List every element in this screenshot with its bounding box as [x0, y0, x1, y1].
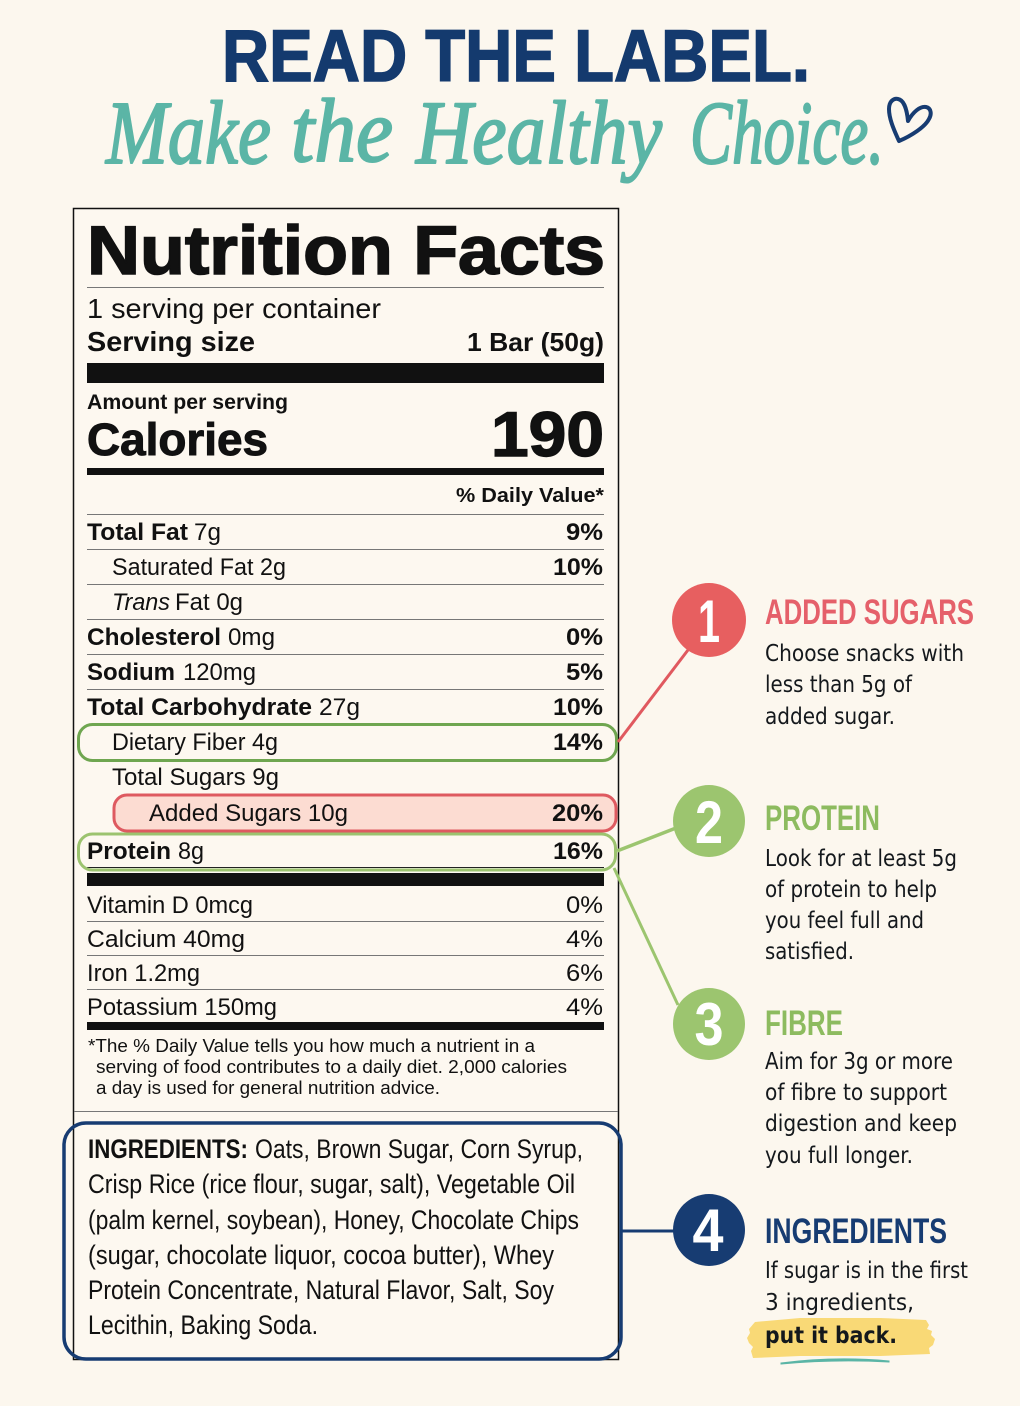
serving information — [87, 293, 604, 357]
subtitle: make the healthy choice: Healthy — [415, 84, 662, 183]
row: sodium: 5% — [566, 659, 603, 686]
row: calcium: 4% — [566, 926, 603, 953]
heading: nutrition facts: Nutrition Facts — [87, 212, 605, 289]
footnote: a day is used for general nutrition advice. — [96, 1078, 440, 1098]
serving information: Serving size — [87, 326, 255, 357]
highlight: protein — [78, 834, 616, 870]
row: dietary fiber: Dietary Fiber 4g — [112, 729, 278, 756]
ingredients list: (sugar, chocolate liquor, cocoa butter), Whey — [88, 1240, 554, 1270]
arrow: connector to fibre callout — [614, 868, 678, 1005]
badge 1: 1 — [698, 588, 720, 655]
badge 4 — [673, 1194, 745, 1266]
badge 3: 3 — [694, 991, 724, 1058]
row: added sugars — [149, 800, 603, 827]
subtitle: make the healthy choice: Make — [104, 84, 271, 183]
text: ingredients advice: If sugar is in the first — [765, 1258, 968, 1284]
row: total fat: 9% — [566, 519, 603, 546]
badge 3 — [673, 988, 745, 1060]
ingredients list: Lecithin, Baking Soda. — [88, 1310, 318, 1340]
callout 4: ingredients — [673, 1194, 968, 1364]
highlight: dietary fiber — [78, 724, 616, 760]
callout 2: protein — [673, 785, 957, 965]
row: saturated fat: Saturated Fat 2g — [112, 554, 286, 581]
badge 4: 4 — [692, 1197, 724, 1264]
text: protein advice: Look for at least 5g — [765, 846, 957, 872]
row: potassium: 4% — [566, 994, 603, 1021]
text: ingredients advice: 3 ingredients, — [765, 1290, 914, 1316]
row: total carbohydrate — [87, 694, 603, 721]
text: fibre advice — [765, 1049, 957, 1169]
highlight: yellow brush stroke — [747, 1318, 935, 1358]
row: saturated fat: 10% — [553, 554, 603, 581]
row: added sugars: 20% — [552, 800, 603, 827]
row: protein: 16% — [553, 838, 603, 865]
text: protein advice — [765, 846, 957, 965]
icon: heart — [889, 99, 931, 141]
panel: nutrition facts label — [74, 208, 618, 1360]
row: added sugars: Added Sugars 10g — [149, 800, 348, 827]
daily value header: % Daily Value* — [456, 484, 604, 507]
ingredients list: INGREDIENTS: — [88, 1134, 248, 1164]
arrow: connector to protein callout — [617, 828, 676, 851]
callout 3: fibre — [673, 988, 957, 1169]
footnote — [88, 1036, 567, 1098]
subtitle: make the healthy choice: Choice. — [690, 84, 884, 183]
row: dietary fiber: 14% — [553, 729, 603, 756]
callout 1: added sugars — [672, 583, 974, 730]
row: protein — [87, 838, 603, 865]
arrow: connector to added sugars callout — [618, 650, 688, 742]
title: read the label: READ THE LABEL. — [222, 16, 810, 97]
text: fibre advice: of fibre to support — [765, 1080, 947, 1106]
text: added sugars advice: less than 5g of — [765, 672, 913, 698]
row: iron: Iron 1.2mg — [87, 960, 200, 987]
text: protein advice: you feel full and — [765, 908, 924, 934]
row: total carbohydrate: 10% — [553, 694, 603, 721]
row: protein: Protein — [87, 838, 171, 865]
text: added sugars advice — [765, 641, 964, 730]
row: sodium: 120mg — [183, 659, 256, 686]
row: sodium — [87, 659, 603, 686]
calories block — [87, 391, 604, 470]
row: total fat — [87, 519, 603, 546]
row: calcium: Calcium 40mg — [87, 926, 245, 953]
row: total fat: 7g — [194, 519, 221, 546]
row: total carbohydrate: 27g — [319, 694, 360, 721]
row: iron — [87, 960, 603, 987]
row: saturated fat — [112, 554, 603, 581]
footnote: serving of food contributes to a daily diet. 2,000 calories — [96, 1057, 567, 1077]
row: cholesterol: Cholesterol — [87, 624, 221, 651]
row: potassium — [87, 994, 603, 1021]
text: added sugars advice: added sugar. — [765, 704, 895, 730]
row: cholesterol: 0mg — [228, 624, 275, 651]
row: trans fat — [112, 589, 243, 616]
heading: protein: PROTEIN — [765, 799, 880, 838]
calories block: Calories — [87, 414, 268, 465]
row: total carbohydrate: Total Carbohydrate — [87, 694, 312, 721]
panel: ingredients box — [64, 1123, 621, 1359]
text: protein advice: of protein to help — [765, 877, 937, 903]
calories block: Amount per serving — [87, 391, 288, 414]
badge 1 — [672, 583, 746, 657]
row: vitamin d: 0% — [566, 892, 603, 919]
subtitle: make the healthy choice — [104, 82, 884, 183]
row: potassium: Potassium 150mg — [87, 994, 277, 1021]
text: fibre advice: Aim for 3g or more — [765, 1049, 953, 1075]
row: cholesterol: 0% — [566, 624, 603, 651]
heading: ingredients: INGREDIENTS — [765, 1212, 947, 1251]
ingredients list: Crisp Rice (rice flour, sugar, salt), Vegetable Oil — [88, 1169, 575, 1199]
row: protein: 8g — [178, 838, 204, 865]
highlight: added sugars — [114, 795, 616, 831]
row: vitamin d: Vitamin D 0mcg — [87, 892, 253, 919]
row: iron: 6% — [566, 960, 603, 987]
text: put it back: put it back. — [765, 1323, 897, 1349]
text: fibre advice: you full longer. — [765, 1143, 913, 1169]
calories block: 190 — [491, 400, 604, 470]
ingredients list: Protein Concentrate, Natural Flavor, Salt, Soy — [88, 1275, 554, 1305]
heading: fibre: FIBRE — [765, 1004, 843, 1043]
row: trans fat: Fat 0g — [175, 589, 243, 616]
row: cholesterol — [87, 624, 603, 651]
text: added sugars advice: Choose snacks with — [765, 641, 964, 667]
text: ingredients advice — [765, 1258, 968, 1316]
text: fibre advice: digestion and keep — [765, 1111, 957, 1137]
row: calcium — [87, 926, 603, 953]
badge 2: 2 — [695, 789, 723, 856]
footnote: *The % Daily Value tells you how much a nutrient in a — [88, 1036, 536, 1056]
row: sodium: Sodium — [87, 659, 175, 686]
subtitle: make the healthy choice: the — [291, 82, 393, 181]
underline: teal stroke — [781, 1359, 889, 1364]
row: vitamin d — [87, 892, 603, 919]
ingredients list: (palm kernel, soybean), Honey, Chocolate Chips — [88, 1205, 579, 1235]
text: protein advice: satisfied. — [765, 939, 854, 965]
serving information: 1 Bar (50g) — [467, 327, 604, 357]
row: dietary fiber — [112, 729, 603, 756]
ingredients list: Oats, Brown Sugar, Corn Syrup, — [255, 1134, 583, 1164]
row: total sugars: Total Sugars 9g — [112, 764, 279, 791]
row: total fat: Total Fat — [87, 519, 188, 546]
badge 2 — [673, 785, 745, 857]
arrow: connector to ingredients callout — [622, 1230, 676, 1232]
serving information: 1 serving per container — [87, 293, 381, 324]
row: trans fat: Trans — [112, 589, 170, 616]
ingredients list — [88, 1134, 583, 1340]
